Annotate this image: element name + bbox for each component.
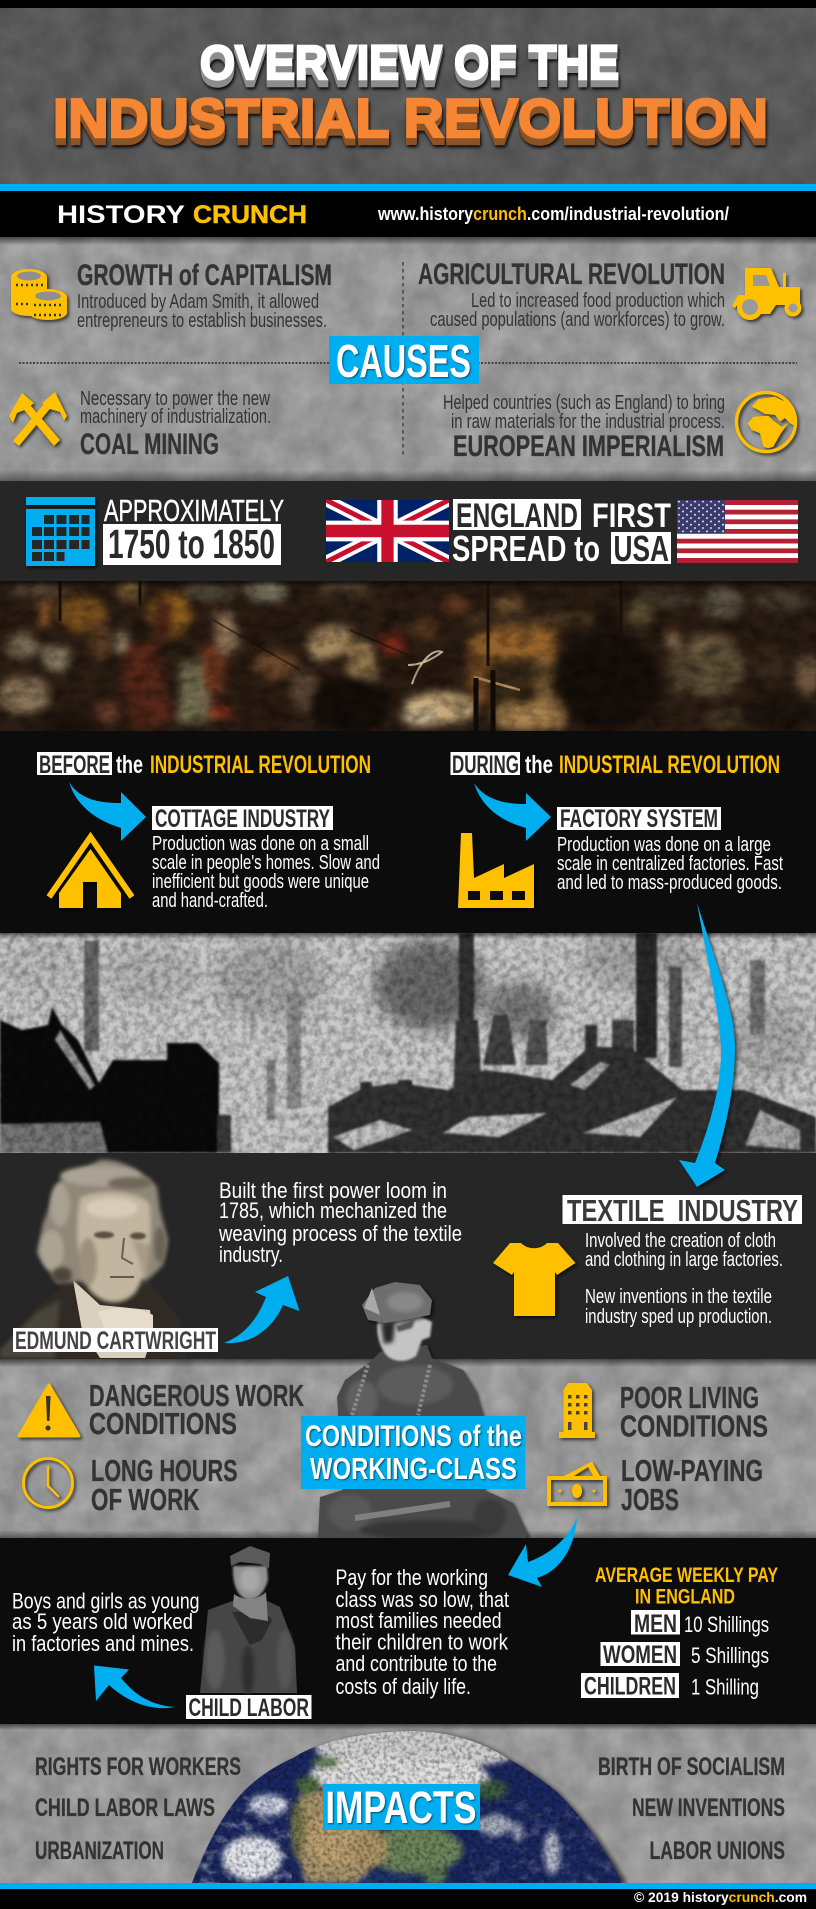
label: factory system [557,805,721,833]
heading: during the industrial revolution [450,751,780,779]
arrow: cartwright to loom text [224,1276,300,1343]
text: growth of capitalism: entrepreneurs to establish businesses. [77,310,327,332]
text: spread to: SPREAD to [452,528,600,569]
heading: growth of capitalism: GROWTH of CAPITALISM [77,259,332,292]
arrow: factory system to textile industry [679,903,735,1187]
text: low pay: most families needed [336,1608,502,1633]
icon: globe [736,392,796,452]
panel: working-class conditions [0,1282,816,1540]
heading: average weekly pay: IN ENGLAND [635,1586,735,1608]
image: child laborer photograph [200,1546,297,1694]
image: portrait of edmund cartwright [0,1160,187,1358]
icon: american flag [677,500,798,563]
panel: brand bar [0,184,816,237]
icon: british flag [326,500,449,562]
website url: www.historycrunch.com/industrial-revolution/ [377,204,729,224]
callout: conditions of the working-class: CONDITIONS of the [305,1420,522,1453]
text: low-paying jobs: LOW-PAYING [621,1453,763,1488]
heading: overview of the: OVERVIEW OF THE [200,37,619,90]
label: england: ENGLAND [456,497,578,535]
text: low-paying jobs [621,1453,763,1517]
text: poor living conditions: CONDITIONS [620,1408,768,1444]
list: impacts left: URBANIZATION [35,1837,164,1865]
text: power loom: 1785, which mechanized the [219,1198,447,1223]
image: factory town engraving [0,932,816,1153]
panel: child labor and wages [0,1517,816,1724]
callout: causes label: CAUSES [336,335,471,387]
text: low pay [336,1565,509,1699]
figures right [556,588,816,732]
heading: industrial revolution: INDUSTRIAL REVOLUTION [53,87,768,149]
heading: average weekly pay [595,1564,778,1608]
machine [402,595,595,731]
panel: textile industry and cartwright [0,1153,816,1359]
text: low-paying jobs: JOBS [621,1482,679,1517]
pay row: women [600,1641,769,1669]
label: edmund cartwright: EDMUND CARTWRIGHT [15,1327,216,1355]
image: miner photograph [318,1282,527,1540]
text: child labor: in factories and mines. [12,1631,194,1656]
text: coal mining: Necessary to power the new [80,388,270,410]
footer [0,1883,816,1909]
text: european imperialism [443,392,725,433]
icon: money [549,1462,605,1504]
text: power loom: weaving process of the textile [218,1221,462,1246]
callout: conditions of the working-class [301,1416,526,1489]
arrow: child labor to text [94,1666,174,1708]
text: power loom [218,1178,462,1267]
text: long hours of work: OF WORK [91,1482,200,1517]
text: low pay: and contribute to the [336,1651,497,1676]
list: impacts right [598,1753,785,1865]
text: dangerous work conditions: CONDITIONS [89,1406,237,1441]
text: low pay: their children to work [336,1630,509,1654]
text: factory system [557,834,783,894]
text: european imperialism: in raw materials for the industrial process. [451,411,725,433]
heading: coal mining: COAL MINING [80,428,219,461]
list: impacts left [35,1753,241,1865]
pay row: children: CHILDREN [584,1672,676,1700]
heading: before the industrial revolution: BEFORE [39,751,110,779]
figures left [0,591,407,734]
text: dangerous work conditions: DANGEROUS WORK [89,1378,304,1413]
pay row: women: 5 Shillings [691,1643,769,1668]
heading: before the industrial revolution: the [116,751,143,779]
icon: coins [11,269,67,320]
text: long hours of work [91,1453,238,1517]
heading: before the industrial revolution [37,751,371,779]
list: impacts left: RIGHTS FOR WORKERS [35,1753,241,1781]
label: cottage industry: COTTAGE INDUSTRY [155,805,330,833]
date range [103,521,281,567]
icon: tractor [732,268,800,318]
arrow: low pay to text [508,1517,577,1587]
text: child labor: as 5 years old worked [12,1609,193,1634]
arrow: before to cottage industry [69,782,146,841]
heading: during the industrial revolution: the [525,751,553,779]
pay row: men [631,1610,769,1638]
text: power loom: industry. [219,1242,283,1267]
image: earth [192,1730,628,1883]
text: coal mining [80,388,271,428]
text: textile industry [585,1230,783,1328]
text: power loom: Built the first power loom in [219,1178,447,1203]
label: usa: USA [614,528,669,569]
icon: calendar [26,497,95,566]
pay row: children: 1 Shilling [691,1674,759,1700]
brand name: HISTORY [57,201,185,229]
icon: house [49,837,132,908]
list: impacts left: CHILD LABOR LAWS [35,1794,215,1822]
icon: factory [458,833,534,908]
background glow left [10,578,371,636]
text: poor living conditions [620,1380,768,1444]
text: approximately: APPROXIMATELY [104,493,284,528]
icon: t-shirt [493,1243,576,1316]
text: child labor: Boys and girls as young [12,1588,200,1614]
text: coal mining: machinery of industrialization. [80,406,271,428]
icon: warning triangle [19,1385,79,1436]
icon: apartment building [559,1383,595,1438]
image: foundry painting [0,578,816,734]
pay row: men: MEN [634,1610,677,1638]
panel: impacts [0,1724,816,1892]
panel: causes [0,237,816,481]
brand name accent: CRUNCH [193,201,307,229]
copyright: © 2019 historycrunch.com [634,1889,807,1905]
label: factory system: FACTORY SYSTEM [560,805,718,833]
icon: crossed hammers [9,392,67,446]
text: cottage industry: scale in people's homes. Slow and [152,852,380,874]
text: child labor [12,1588,200,1656]
heading: during the industrial revolution: DURING [452,751,519,779]
text: agricultural revolution: Led to increased food production which [471,290,725,312]
date range: 1750 to 1850 [108,521,275,567]
text: dangerous work conditions [89,1378,304,1441]
text: cottage industry [152,833,380,912]
panel: title banner [0,8,816,184]
text: cottage industry: inefficient but goods were unique [152,871,369,893]
text: agricultural revolution [430,290,725,331]
heading: before the industrial revolution: INDUSTRIAL REVOLUTION [150,751,371,779]
text: first: FIRST [592,497,671,535]
text: cottage industry: Production was done on a small [152,833,369,855]
text: long hours of work: LONG HOURS [91,1453,238,1488]
text: low pay: class was so low, that [336,1587,509,1612]
callout: impacts label: IMPACTS [326,1782,476,1833]
label: child labor: CHILD LABOR [188,1694,309,1722]
panel: timeline and geography [0,481,816,581]
text: growth of capitalism [77,291,327,332]
text: cottage industry: and hand-crafted. [152,890,268,912]
arrow: during to factory system [474,783,551,841]
pay row: women: WOMEN [603,1641,677,1669]
panel: before and during [0,731,816,933]
label: cottage industry [152,805,333,833]
pay row: men: 10 Shillings [684,1612,769,1637]
text: low pay: Pay for the working [336,1565,488,1590]
shadow: top of engraving [0,933,816,939]
icon: clock [24,1458,72,1508]
callout: conditions of the working-class: WORKING-CLASS [310,1451,517,1486]
text: growth of capitalism: Introduced by Adam Smith, it allowed [77,291,319,313]
text: low pay: costs of daily life. [336,1674,471,1699]
